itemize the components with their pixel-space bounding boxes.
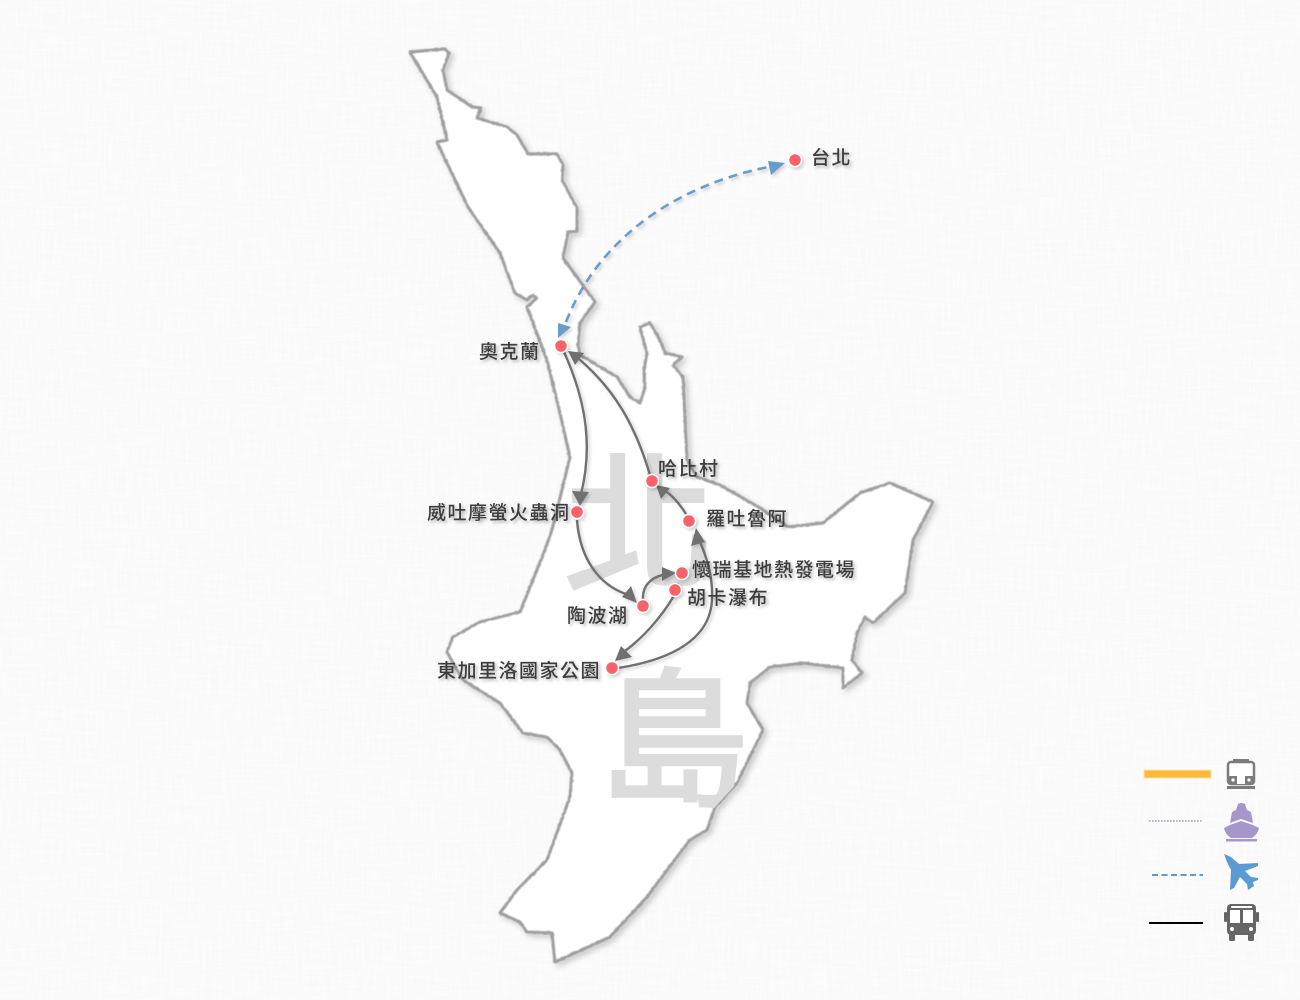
legend line: train — [1144, 770, 1211, 778]
icon: ship — [1224, 803, 1259, 842]
place labels — [427, 147, 856, 682]
icon: train — [1227, 759, 1255, 789]
place labels: 威吐摩螢火蟲洞 — [427, 502, 571, 524]
island outline: North Island — [410, 49, 933, 962]
icon: plane — [1224, 854, 1258, 890]
icon: bus — [1224, 904, 1259, 941]
place labels: 奧克蘭 — [479, 341, 541, 363]
location markers — [554, 154, 802, 674]
place labels: 胡卡瀑布 — [687, 587, 769, 609]
legend line: bus — [1149, 922, 1203, 924]
place labels: 東加里洛國家公園 — [437, 660, 601, 682]
place labels: 陶波湖 — [567, 605, 629, 627]
heading: 北島 watermark: 北 — [564, 442, 714, 610]
flight route: Taipei to Auckland — [558, 161, 785, 338]
heading: 北島 watermark: 島 — [599, 658, 749, 826]
legend line: plane — [1152, 874, 1203, 876]
bus routes — [564, 351, 712, 668]
place labels: 羅吐魯阿 — [706, 508, 788, 530]
legend — [1144, 759, 1259, 941]
heading: 北島 watermark — [566, 453, 743, 808]
place labels: 哈比村 — [658, 458, 720, 480]
place labels: 台北 — [811, 147, 852, 169]
legend line: ship — [1149, 820, 1203, 822]
place labels: 懷瑞基地熱發電場 — [692, 559, 856, 581]
